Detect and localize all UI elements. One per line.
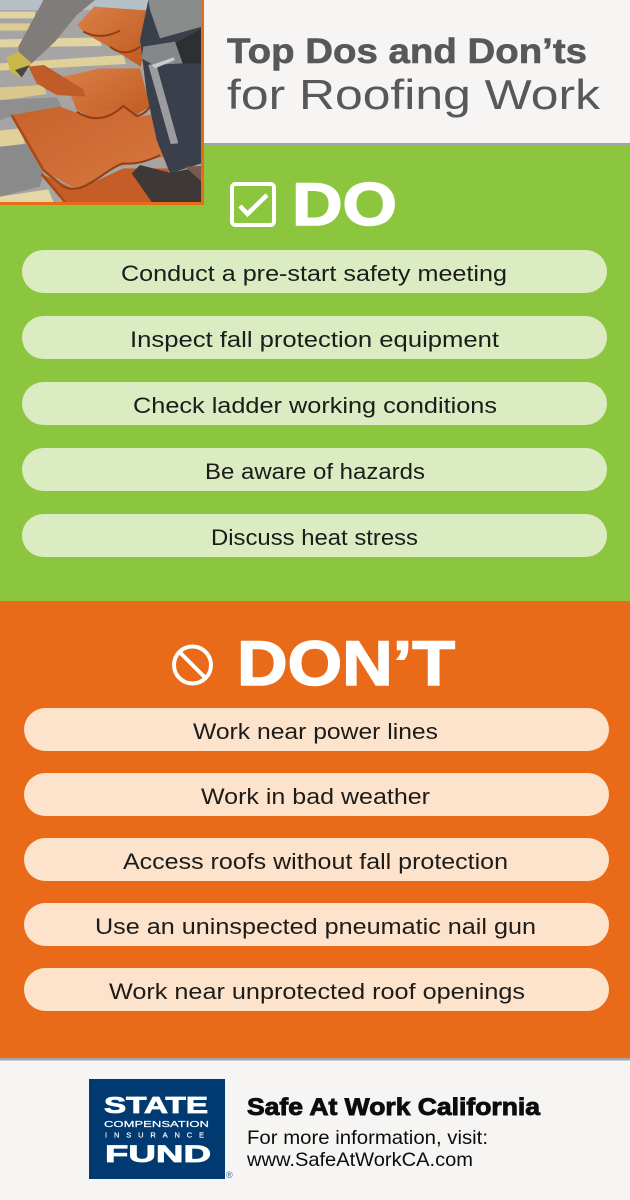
panel: do background (0, 146, 630, 601)
logo: State Compensation Insurance Fund (89, 1079, 233, 1180)
title: Top Dos and Don’ts (227, 32, 587, 71)
title: for Roofing Work (227, 71, 601, 118)
do list (22, 250, 607, 557)
item: roof openings: Work near unprotected roof openings (109, 979, 525, 1004)
photo: roofer laying orange tiles (0, 0, 204, 205)
item: nail gun: Use an uninspected pneumatic nail gun (95, 914, 536, 939)
footer text: Safe At Work California (247, 1094, 541, 1121)
don't list (24, 708, 609, 1011)
item: ladder: Check ladder working conditions (133, 393, 497, 418)
item: hazards (22, 448, 607, 491)
icon: checkbox (232, 184, 274, 225)
heading: do: DO (292, 171, 397, 238)
item: hazards: Be aware of hazards (205, 459, 425, 484)
item: fall protection (22, 316, 607, 359)
item: roof access (24, 838, 609, 881)
footer text (246, 1094, 541, 1171)
item: safety meeting (22, 250, 607, 293)
item: fall protection: Inspect fall protection equipment (130, 327, 499, 352)
item: bad weather (24, 773, 609, 816)
footer text: For more information, visit: (247, 1127, 488, 1149)
logo: State Compensation Insurance Fund: INSURANCE (105, 1130, 209, 1140)
logo: State Compensation Insurance Fund: COMPENSATION (104, 1119, 209, 1129)
heading: don't: DON’T (237, 629, 455, 699)
item: power lines (24, 708, 609, 751)
header panel (0, 0, 630, 146)
title (227, 32, 601, 118)
item: nail gun (24, 903, 609, 946)
item: safety meeting: Conduct a pre-start safety meeting (121, 261, 507, 286)
logo: State Compensation Insurance Fund: ® (226, 1170, 233, 1180)
footer panel (0, 1058, 630, 1200)
item: heat stress: Discuss heat stress (211, 525, 418, 550)
panel: don't background (0, 601, 630, 1058)
item: heat stress (22, 514, 607, 557)
item: bad weather: Work in bad weather (201, 784, 430, 809)
footer text: www.SafeAtWorkCA.com (246, 1149, 473, 1171)
item: ladder (22, 382, 607, 425)
icon: prohibited sign (174, 646, 211, 684)
item: roof access: Access roofs without fall protection (123, 849, 508, 874)
logo: State Compensation Insurance Fund: FUND (105, 1141, 211, 1168)
item: roof openings (24, 968, 609, 1011)
logo: State Compensation Insurance Fund: STATE (104, 1092, 208, 1118)
item: power lines: Work near power lines (193, 719, 438, 744)
